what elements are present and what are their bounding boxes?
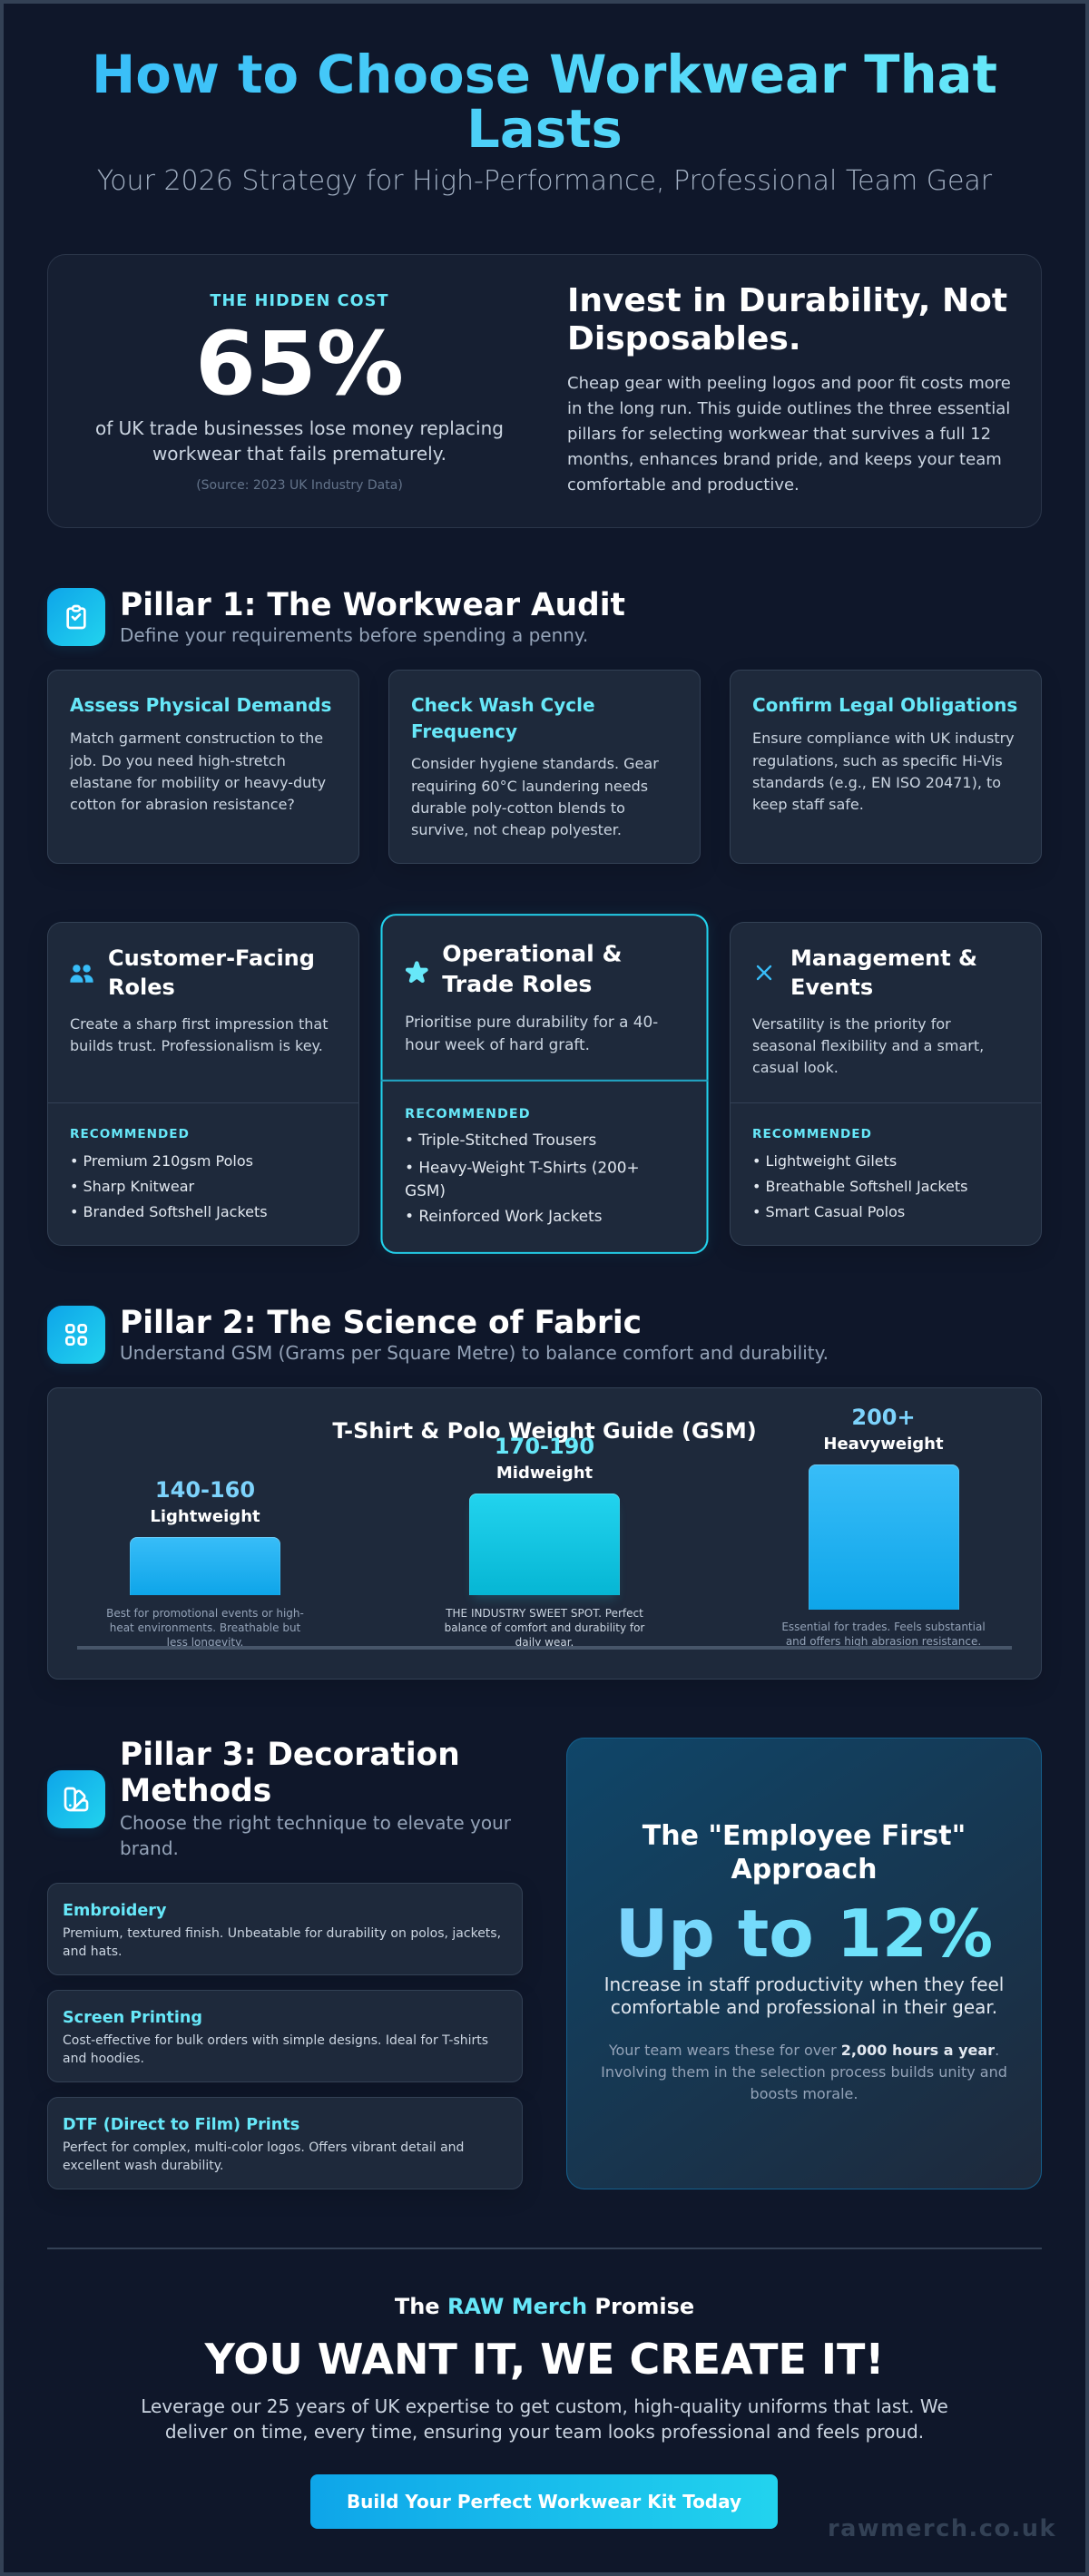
subtitle: Your 2026 Strategy for High-Performance, Professional Team Gear <box>97 165 992 196</box>
icon: users <box>70 965 93 983</box>
source note: (Source: 2023 UK Industry Data) <box>196 478 403 493</box>
icon: clipboard check <box>47 588 105 646</box>
role title: Roles <box>108 975 175 1000</box>
stat description: Increase in staff productivity when they feel <box>604 1974 1004 1995</box>
panel heading: The "Employee First" <box>643 1820 966 1852</box>
panel: hidden cost hero <box>47 254 1042 528</box>
stat description <box>604 1974 1004 2018</box>
recommended list item: • Reinforced Work Jackets <box>405 1208 602 1226</box>
role description <box>70 1014 329 1054</box>
method title: Embroidery <box>63 1902 166 1920</box>
pillar 3 title: Methods <box>120 1773 271 1809</box>
panel: customer-facing roles <box>47 922 359 1246</box>
card body: keep staff safe. <box>752 796 864 813</box>
recommended list item <box>405 1158 640 1200</box>
role title <box>790 945 977 1000</box>
recommended list <box>70 1152 268 1220</box>
card body: requiring 60°C laundering needs <box>411 778 648 795</box>
role description <box>405 1013 658 1053</box>
role description: casual look. <box>752 1059 839 1076</box>
card body: standards (e.g., EN ISO 20471), to <box>752 774 1001 791</box>
heading: pillar 2 <box>47 1305 829 1368</box>
card body: survive, not cheap polyester. <box>411 821 622 838</box>
method description: Cost-effective for bulk orders with simple designs. Ideal for T-shirts <box>63 2033 488 2048</box>
recommended list: • Premium 210gsm Polos <box>70 1152 253 1170</box>
slogan: YOU WANT IT, WE CREATE IT! <box>205 2335 884 2384</box>
method title: Screen Printing <box>63 2009 202 2027</box>
stat description: workwear that fails prematurely. <box>152 443 446 465</box>
pillar 2 subtitle: Understand GSM (Grams per Square Metre) to balance comfort and durability. <box>120 1341 829 1363</box>
recommended list: • Smart Casual Polos <box>752 1203 905 1220</box>
pillar 3 subtitle: brand. <box>120 1837 179 1858</box>
stat description: of UK trade businesses lose money replacing <box>95 417 504 439</box>
card body: Match garment construction to the <box>70 730 323 747</box>
recommended list <box>752 1152 967 1220</box>
heading: pillar 3 <box>47 1737 511 1858</box>
bar chart: GSM weight guide <box>47 1387 1042 1680</box>
method title: DTF (Direct to Film) Prints <box>63 2116 299 2134</box>
watermark: rawmerch.co.uk: rawmerch.co.uk <box>828 2515 1056 2542</box>
icon: star <box>405 961 428 983</box>
button: call to action <box>310 2474 778 2529</box>
description: lightweight <box>106 1607 304 1649</box>
method description <box>63 2033 488 2066</box>
heading: invest in durability: Invest in Durability, Not <box>567 282 1007 319</box>
card body: durable poly-cotton blends to <box>411 799 625 817</box>
method description <box>63 1926 501 1959</box>
label: heavyweight: Heavyweight <box>823 1435 944 1454</box>
role title <box>108 945 315 1000</box>
method description: excellent wash durability. <box>63 2159 223 2173</box>
recommended list: • Sharp Knitwear <box>70 1178 194 1195</box>
description: midweight: THE INDUSTRY SWEET SPOT. Perfect <box>446 1607 643 1620</box>
description: heavyweight: and offers high abrasion resistance. <box>786 1635 981 1648</box>
supporting note <box>601 2042 1007 2102</box>
stat: up to 12%: Up to 12% <box>615 1895 993 1972</box>
pillar 1 title: Pillar 1: The Workwear Audit <box>120 586 625 622</box>
intro paragraph: in the long run. This guide outlines the three essential <box>567 399 1010 418</box>
closing paragraph: deliver on time, every time, ensuring your team looks professional and feels proud. <box>165 2421 924 2443</box>
method description: and hoodies. <box>63 2052 144 2066</box>
value: 170-190: 170-190 <box>495 1434 594 1459</box>
supporting note: Involving them in the selection process builds unity and <box>601 2063 1007 2081</box>
card: check wash cycle <box>388 670 701 864</box>
button label: Build Your Perfect Workwear Kit Today <box>347 2491 741 2512</box>
card body: cotton for abrasion resistance? <box>70 796 295 813</box>
panel heading <box>643 1820 966 1885</box>
recommended list: • Lightweight Gilets <box>752 1152 897 1170</box>
icon: cross <box>757 965 771 980</box>
intro paragraph <box>567 374 1011 495</box>
card body: regulations, such as specific Hi-Vis <box>752 751 1003 769</box>
card body <box>69 730 326 813</box>
card body: Ensure compliance with UK industry <box>752 730 1015 747</box>
recommended label: RECOMMENDED <box>70 1127 190 1141</box>
stat: 65%: 65% <box>195 313 404 415</box>
card body <box>752 730 1015 813</box>
card: embroidery <box>47 1883 523 1975</box>
pillar 3 subtitle: Choose the right technique to elevate your <box>120 1811 511 1833</box>
method description: Premium, textured finish. Unbeatable for durability on polos, jackets, <box>63 1926 501 1941</box>
title <box>92 44 997 160</box>
card body: Consider hygiene standards. Gear <box>411 755 659 772</box>
card title: Check Wash Cycle <box>411 694 595 716</box>
description: heavyweight <box>781 1621 986 1648</box>
card: DTF prints <box>47 2097 523 2189</box>
panel heading: Approach <box>731 1853 877 1885</box>
description: midweight: daily wear. <box>515 1636 574 1649</box>
recommended list item: GSM) <box>405 1181 446 1200</box>
icon: grid <box>47 1306 105 1364</box>
panel: employee first approach <box>566 1738 1042 2189</box>
label: midweight: Midweight <box>496 1464 593 1483</box>
description: midweight <box>445 1607 644 1649</box>
card: screen printing <box>47 1990 523 2082</box>
promise line: The RAW Merch Promise <box>395 2294 694 2319</box>
footer: promise and call to action <box>47 2248 1042 2529</box>
role title: Customer-Facing <box>108 945 315 971</box>
heading: invest in durability: Disposables. <box>567 320 801 358</box>
recommended list: • Breathable Softshell Jackets <box>752 1178 967 1195</box>
recommended label: RECOMMENDED <box>405 1106 531 1121</box>
bar: heavyweight <box>809 1464 959 1610</box>
role description: Versatility is the priority for <box>752 1014 951 1033</box>
recommended list item: • Heavy-Weight T-Shirts (200+ <box>405 1158 640 1176</box>
value: 200+: 200+ <box>851 1405 916 1430</box>
stat description: comfortable and professional in their gear. <box>611 1996 997 2018</box>
description: lightweight: less longevity. <box>167 1636 243 1649</box>
intro paragraph: months, enhances brand pride, and keeps your team <box>567 450 1002 469</box>
role title: Events <box>790 975 873 1000</box>
role description: hour week of hard graft. <box>405 1035 590 1053</box>
intro paragraph: comfortable and productive. <box>567 475 800 495</box>
title: How to Choose Workwear That <box>92 44 997 105</box>
pillar 3 title <box>120 1737 460 1809</box>
closing paragraph <box>141 2395 948 2443</box>
card body: job. Do you need high-stretch <box>70 751 286 769</box>
method description <box>63 2140 464 2173</box>
role description: builds trust. Professionalism is key. <box>70 1037 323 1054</box>
card title <box>411 694 595 742</box>
card: assess physical demands <box>47 670 359 864</box>
role description: seasonal flexibility and a smart, <box>752 1037 984 1054</box>
value: 140-160: 140-160 <box>155 1477 255 1503</box>
recommended label: RECOMMENDED <box>752 1127 872 1141</box>
recommended list: • Branded Softshell Jackets <box>70 1203 268 1220</box>
role description: Prioritise pure durability for a 40- <box>405 1013 658 1031</box>
closing paragraph: Leverage our 25 years of UK expertise to get custom, high-quality uniforms that last. We <box>141 2395 948 2417</box>
description: heavyweight: Essential for trades. Feels substantial <box>781 1621 986 1633</box>
pillar 1 subtitle: Define your requirements before spending a penny. <box>120 624 588 646</box>
label: the hidden cost: THE HIDDEN COST <box>210 292 389 310</box>
card title: Confirm Legal Obligations <box>752 694 1017 716</box>
intro paragraph: pillars for selecting workwear that survives a full 12 <box>567 425 991 444</box>
panel: management and events <box>730 922 1042 1246</box>
supporting note: boosts morale. <box>751 2085 858 2102</box>
method description: and hats. <box>63 1944 122 1959</box>
role title <box>442 940 623 997</box>
bar: midweight <box>469 1494 620 1595</box>
stat description <box>95 417 504 465</box>
bar: lightweight <box>130 1537 280 1595</box>
card: confirm legal obligations <box>730 670 1042 864</box>
pillar 2 title: Pillar 2: The Science of Fabric <box>120 1305 642 1341</box>
card body <box>411 755 659 838</box>
description: lightweight: Best for promotional events or high- <box>106 1607 304 1620</box>
icon: swatch <box>47 1770 105 1828</box>
description: lightweight: heat environments. Breathable but <box>110 1621 300 1634</box>
label: lightweight: Lightweight <box>150 1507 260 1526</box>
heading: pillar 1 <box>47 586 625 650</box>
card title: Assess Physical Demands <box>70 694 331 716</box>
title: Lasts <box>466 99 623 160</box>
intro paragraph: Cheap gear with peeling logos and poor fit costs more <box>567 374 1011 393</box>
role title: Trade Roles <box>442 971 592 997</box>
supporting note: Your team wears these for over 2,000 hours a year. <box>609 2042 999 2059</box>
card title: Frequency <box>411 720 517 742</box>
panel: operational and trade roles <box>380 914 709 1254</box>
recommended list: • Triple-Stitched Trousers <box>405 1131 596 1149</box>
description: midweight: balance of comfort and durability for <box>445 1621 644 1634</box>
role title: Operational & <box>442 940 623 966</box>
role description <box>752 1014 984 1076</box>
heading: invest in durability <box>567 282 1007 358</box>
card body: elastane for mobility or heavy-duty <box>70 774 326 791</box>
role title: Management & <box>790 945 977 971</box>
role description: Create a sharp first impression that <box>70 1014 328 1033</box>
pillar 3 title: Pillar 3: Decoration <box>120 1737 460 1773</box>
pillar 3 subtitle <box>120 1811 511 1858</box>
method description: Perfect for complex, multi-color logos. Offers vibrant detail and <box>63 2140 464 2155</box>
chart title: T-Shirt & Polo Weight Guide (GSM) <box>332 1417 757 1443</box>
